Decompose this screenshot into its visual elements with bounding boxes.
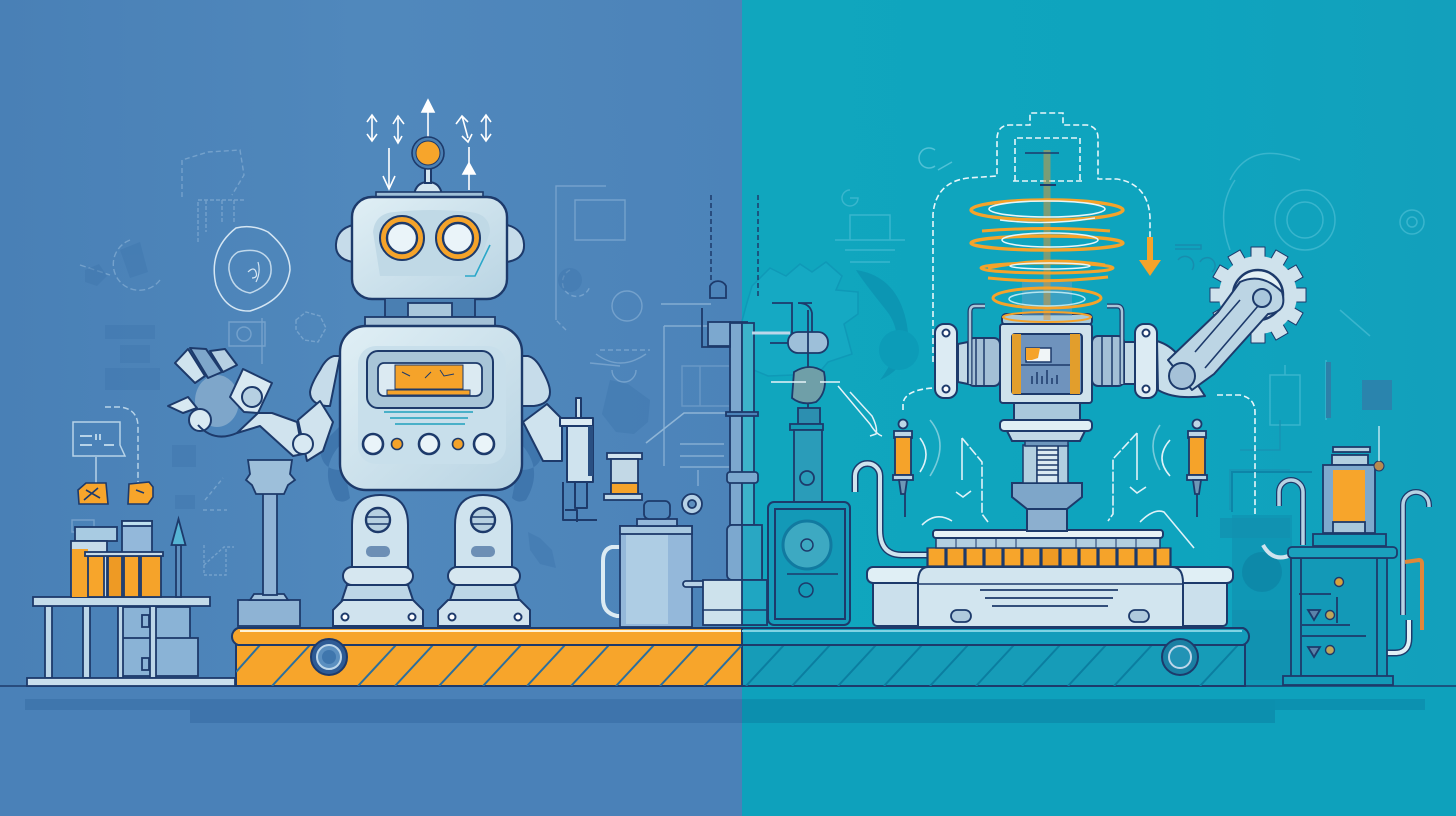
faint outlined circle sketch bbox=[214, 227, 290, 311]
robot bbox=[168, 100, 597, 626]
hook left bbox=[1263, 480, 1303, 557]
center pipe tower bbox=[702, 281, 767, 625]
neck bbox=[365, 299, 495, 326]
note box with connectors bbox=[73, 407, 138, 484]
conveyor platform bbox=[232, 628, 1249, 686]
hook right bbox=[1387, 492, 1429, 653]
forearm bbox=[237, 413, 303, 456]
spring bbox=[1037, 445, 1058, 483]
platform top rail: orange bbox=[232, 628, 742, 645]
side plate left bbox=[935, 324, 957, 398]
antenna bbox=[412, 137, 444, 195]
wrist block bbox=[230, 369, 272, 413]
buttons bbox=[363, 434, 494, 454]
dashed power circuit bbox=[903, 113, 1255, 514]
roller left bbox=[311, 639, 347, 675]
orange tag icons bbox=[78, 482, 153, 504]
platform top rail: teal bbox=[742, 628, 1249, 645]
ears bbox=[336, 225, 524, 262]
press tray bbox=[867, 530, 1233, 626]
orange energy coil bbox=[971, 150, 1123, 322]
copper pipe bbox=[1405, 560, 1422, 630]
left workbench bbox=[27, 519, 235, 686]
arm to gear bbox=[1157, 247, 1306, 397]
gear bbox=[1210, 247, 1306, 343]
cabinet right bbox=[1263, 426, 1429, 685]
shoulders bbox=[310, 356, 550, 502]
white guide lines bbox=[850, 392, 1194, 548]
arrow post bbox=[172, 519, 186, 597]
vent lines bbox=[384, 412, 473, 424]
jar bbox=[1323, 426, 1384, 533]
arm shoulder bbox=[1157, 341, 1205, 397]
round gauge cabinet bbox=[768, 502, 850, 625]
right side pipe and gauges bbox=[752, 303, 882, 502]
hook pipe left of tray bbox=[855, 463, 928, 555]
signal arrows bbox=[367, 100, 491, 190]
press head housing bbox=[935, 247, 1306, 403]
handles bbox=[970, 306, 1122, 384]
syringe right bbox=[1187, 420, 1207, 517]
eyes bbox=[380, 216, 480, 260]
dashed dark drop lines bbox=[711, 195, 758, 298]
stacked canisters bbox=[71, 521, 163, 597]
background: left blue half bbox=[0, 0, 742, 816]
body bbox=[340, 326, 522, 490]
faint gear and dark shapes behind right side bbox=[738, 262, 919, 380]
arm and hand: left bbox=[168, 348, 333, 461]
roller right bbox=[1162, 639, 1198, 675]
spool jar bbox=[604, 453, 642, 500]
faint machine behind cabinet bbox=[1220, 362, 1392, 685]
housing box bbox=[1000, 324, 1092, 403]
orange arrow bbox=[1139, 237, 1161, 276]
leg left bbox=[333, 495, 423, 626]
press column bbox=[1000, 403, 1092, 531]
platform base: orange bbox=[236, 644, 742, 686]
platform base: teal bbox=[742, 644, 1245, 686]
arm and tool: right bbox=[523, 398, 597, 522]
faint blueprint sketches: right side bbox=[835, 148, 1424, 510]
background: right teal half bbox=[742, 0, 1456, 816]
pedestal bbox=[238, 460, 300, 626]
fingers bbox=[175, 349, 205, 383]
side plate right bbox=[1135, 324, 1157, 398]
head bbox=[352, 192, 507, 299]
orange block row bbox=[927, 548, 1171, 567]
jug bbox=[603, 494, 716, 627]
side couplings bbox=[958, 336, 1136, 386]
elbow bbox=[298, 401, 333, 461]
arm beam bbox=[1168, 279, 1283, 390]
syringe left bbox=[893, 420, 913, 517]
chest screen bbox=[367, 351, 493, 408]
faint blueprint sketches: left side bbox=[72, 150, 746, 575]
leg right bbox=[438, 495, 530, 626]
palm bbox=[195, 375, 239, 427]
floor and shadows bbox=[0, 686, 1456, 816]
faint dark shapes: left side bbox=[85, 242, 650, 568]
